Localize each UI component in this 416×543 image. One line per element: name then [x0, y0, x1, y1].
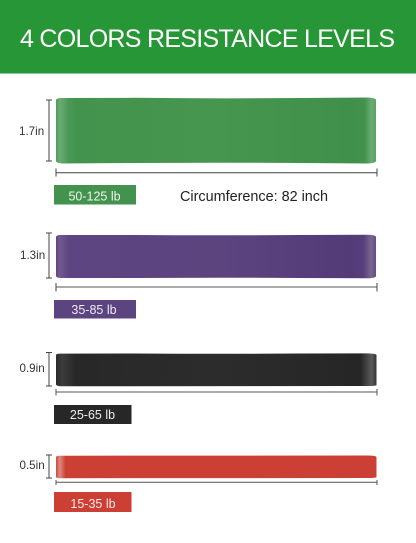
- band: green: [56, 98, 376, 164]
- band: red: [56, 456, 376, 478]
- width dimension line: [56, 480, 377, 485]
- panel: green band: [19, 98, 377, 205]
- band: purple: [56, 235, 376, 278]
- height bracket: 0.5in: [46, 455, 52, 478]
- band: black: [56, 353, 376, 386]
- width dimension line: [56, 168, 377, 176]
- height bracket: 0.9in: [46, 352, 52, 386]
- circumference text: Circumference: 82 inch: [180, 189, 328, 205]
- height label: 1.7in: 1.7in: [19, 125, 44, 138]
- height label: 0.5in: 0.5in: [20, 459, 45, 472]
- resistance label: 25-65 lb: [54, 405, 132, 424]
- resistance label: 50-125 lb: [54, 185, 136, 204]
- height label: 0.9in: 0.9in: [20, 362, 45, 375]
- resistance label: 15-35 lb: 15-35 lb: [70, 497, 116, 511]
- height bracket: 1.7in: [46, 100, 52, 161]
- resistance label: 15-35 lb: [54, 492, 132, 512]
- width dimension line: [56, 283, 377, 292]
- header banner: [0, 0, 416, 74]
- panel: black band: [20, 352, 377, 424]
- panel: purple band: [20, 233, 377, 318]
- resistance label: 50-125 lb: 50-125 lb: [68, 190, 121, 204]
- title: 4 COLORS RESISTANCE LEVELS: [20, 25, 395, 53]
- panel: red band: [20, 455, 377, 512]
- resistance label: 25-65 lb: 25-65 lb: [70, 408, 115, 422]
- resistance label: 35-85 lb: [54, 300, 136, 318]
- resistance label: 35-85 lb: 35-85 lb: [71, 303, 117, 317]
- height bracket: 1.3in: [46, 233, 52, 278]
- width dimension line: [56, 389, 377, 396]
- height label: 1.3in: 1.3in: [20, 249, 45, 262]
